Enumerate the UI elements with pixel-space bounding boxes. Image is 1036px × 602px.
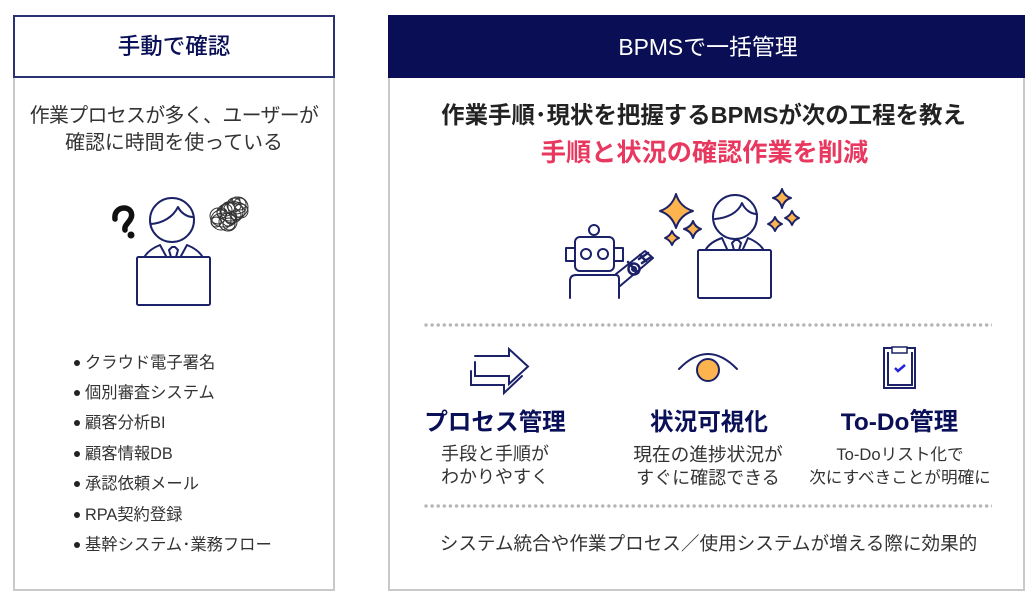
heading: manual confirmation: 手動で確認 bbox=[118, 34, 230, 59]
heading: to-do management: To-Do管理 bbox=[841, 409, 958, 436]
bullet: 顧客情報DB: 顧客情報DB bbox=[85, 445, 173, 463]
text: process management: 手段と手順が bbox=[441, 444, 549, 464]
text: process management bbox=[441, 444, 549, 487]
divider: upper dots bbox=[424, 323, 992, 327]
text: status visibility bbox=[633, 444, 783, 488]
feature: to-do management bbox=[809, 346, 991, 487]
text: to-do management: To-Doリスト化で bbox=[836, 445, 964, 464]
text block: manual problem: 作業プロセスが多く、ユーザーが bbox=[30, 105, 318, 127]
text block: BPMS headline: 作業手順･現状を把握するBPMSが次の工程を教え bbox=[441, 102, 966, 128]
feature: status visibility bbox=[633, 353, 783, 488]
panel: manual confirmation bbox=[13, 15, 335, 591]
divider: lower dots bbox=[424, 504, 992, 508]
text: status visibility: 現在の進捗状況が bbox=[633, 444, 783, 465]
text block: manual problem: 確認に時間を使っている bbox=[65, 132, 283, 154]
text: process management: わかりやすく bbox=[441, 467, 549, 487]
panel: BPMS management bbox=[388, 15, 1025, 591]
icon: arrows bbox=[470, 346, 530, 396]
feature: process management bbox=[424, 346, 566, 487]
icon: clipboard bbox=[883, 346, 916, 389]
text block: conclusion: システム統合や作業プロセス／使用システムが増える際に効果的 bbox=[440, 533, 977, 554]
text: to-do management: 次にすべきことが明確に bbox=[809, 468, 991, 487]
bullet: 承認依頼メール: 承認依頼メール bbox=[85, 475, 199, 493]
icon: eye bbox=[678, 353, 738, 382]
bullet: クラウド電子署名: クラウド電子署名 bbox=[85, 354, 215, 372]
heading: BPMS management bbox=[388, 15, 1025, 78]
heading: status visibility: 状況可視化 bbox=[650, 410, 768, 436]
bullet: 基幹システム・業務フロー: 基幹システム･業務フロー bbox=[85, 536, 272, 554]
text block: pink highlight: 手順と状況の確認作業を削減 bbox=[541, 139, 868, 167]
bullet: 個別審査システム: 個別審査システム bbox=[85, 384, 215, 402]
text: to-do management bbox=[809, 445, 991, 487]
text: status visibility: すぐに確認できる bbox=[636, 468, 780, 488]
bullet: 顧客分析BI: 顧客分析BI bbox=[85, 414, 166, 432]
heading: BPMS management: BPMSで一括管理 bbox=[618, 34, 798, 60]
bullet: RPA契約登録: RPA契約登録 bbox=[85, 506, 182, 524]
text block: manual problem bbox=[30, 105, 318, 154]
heading: process management: プロセス管理 bbox=[424, 410, 566, 436]
heading: manual confirmation bbox=[13, 15, 335, 78]
